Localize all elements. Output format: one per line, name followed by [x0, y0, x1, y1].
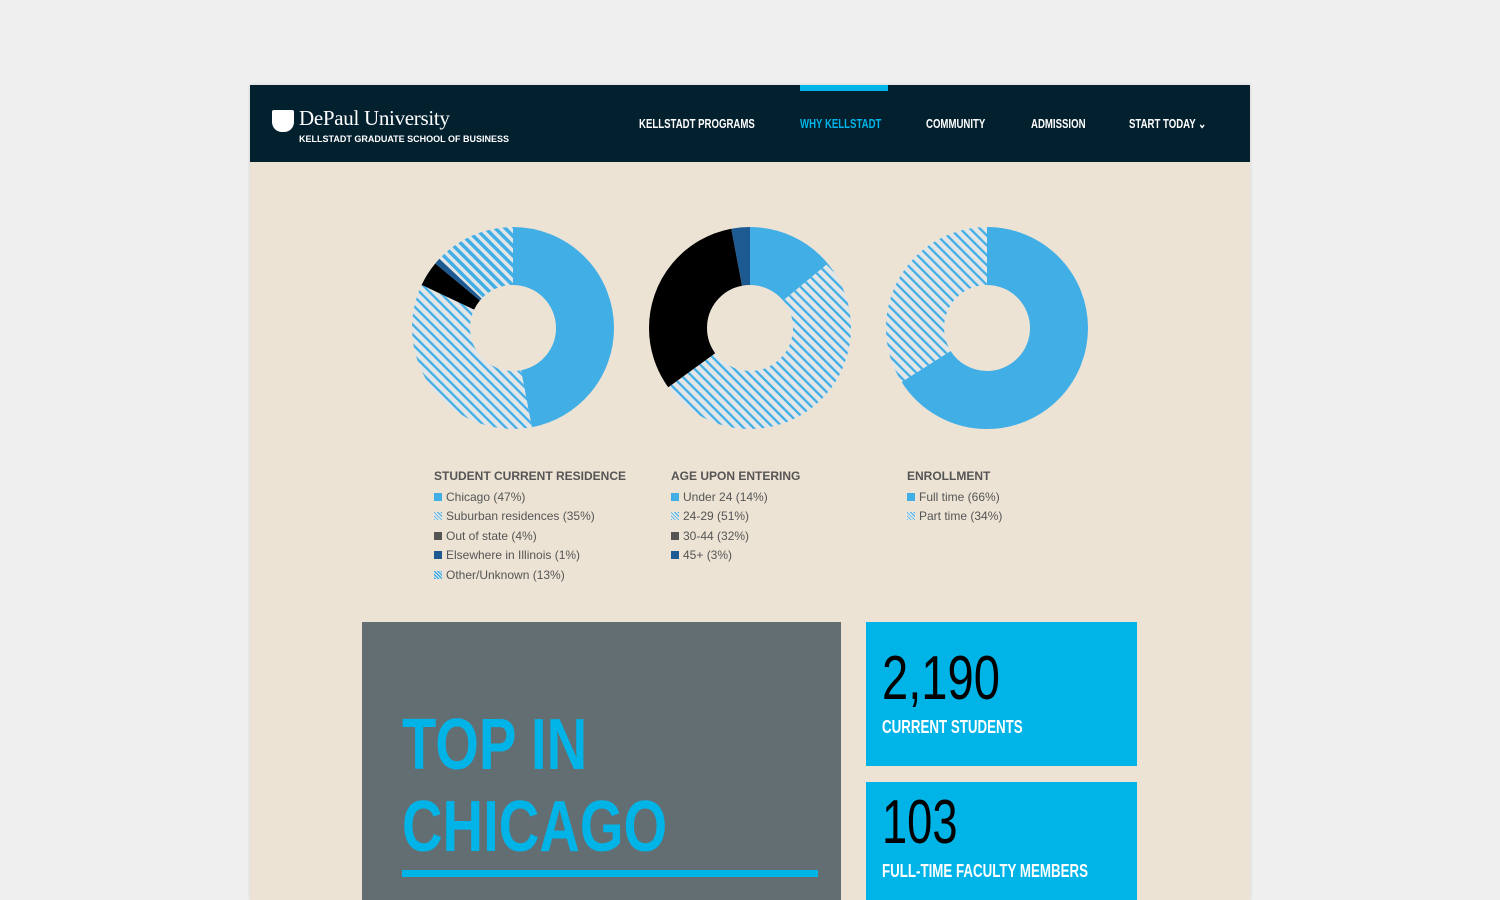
legend: residence: Suburban residences (35%)	[446, 509, 595, 523]
legend: residence: Chicago (47%)	[446, 490, 525, 504]
chart: enrollment	[915, 256, 1059, 400]
panel: top in chicago	[362, 622, 841, 900]
legend: residence: STUDENT CURRENT RESIDENCE	[434, 469, 626, 483]
donut charts	[412, 227, 1088, 429]
legend: age: AGE UPON ENTERING	[671, 469, 800, 483]
legend: age: Under 24 (14%)	[683, 490, 768, 504]
stat: students: 2,190	[882, 644, 1000, 713]
stat: faculty	[866, 782, 1137, 900]
stat: students: CURRENT STUDENTS	[882, 717, 1023, 737]
stat: students	[866, 622, 1137, 766]
panel: top in chicago: TOP IN	[402, 705, 587, 785]
legend: age	[671, 469, 800, 562]
logo: KELLSTADT GRADUATE SCHOOL OF BUSINESS	[299, 134, 509, 144]
logo	[272, 106, 509, 144]
chart: residence	[441, 256, 585, 400]
page frame	[250, 85, 1250, 900]
legend: residence	[434, 469, 626, 582]
text: COMMUNITY	[926, 116, 985, 131]
icon: shield	[272, 110, 294, 132]
legend: age: 30-44 (32%)	[683, 528, 749, 542]
legend: age: 24-29 (51%)	[683, 509, 749, 523]
stat: faculty: 103	[882, 788, 958, 857]
legend: enrollment: Part time (34%)	[919, 509, 1002, 523]
legend: residence: Other/Unknown (13%)	[446, 568, 565, 582]
legend: age: 45+ (3%)	[683, 548, 732, 562]
header bar	[250, 85, 1250, 162]
logo: DePaul University	[299, 106, 450, 130]
stat: faculty: FULL-TIME FACULTY MEMBERS	[882, 861, 1088, 881]
chart: age	[678, 256, 822, 400]
text: WHY KELLSTADT	[800, 116, 881, 131]
legend: residence: Elsewhere in Illinois (1%)	[446, 548, 580, 562]
legend: enrollment	[907, 469, 1002, 523]
text: START TODAY ⌄	[1129, 116, 1206, 131]
legend: residence: Out of state (4%)	[446, 528, 537, 542]
legend: enrollment: ENROLLMENT	[907, 469, 990, 483]
legend: enrollment: Full time (66%)	[919, 490, 1000, 504]
text: ADMISSION	[1031, 116, 1086, 131]
nav menu: KELLSTADT PROGRAMS	[639, 116, 755, 131]
panel: top in chicago: CHICAGO	[402, 787, 667, 867]
